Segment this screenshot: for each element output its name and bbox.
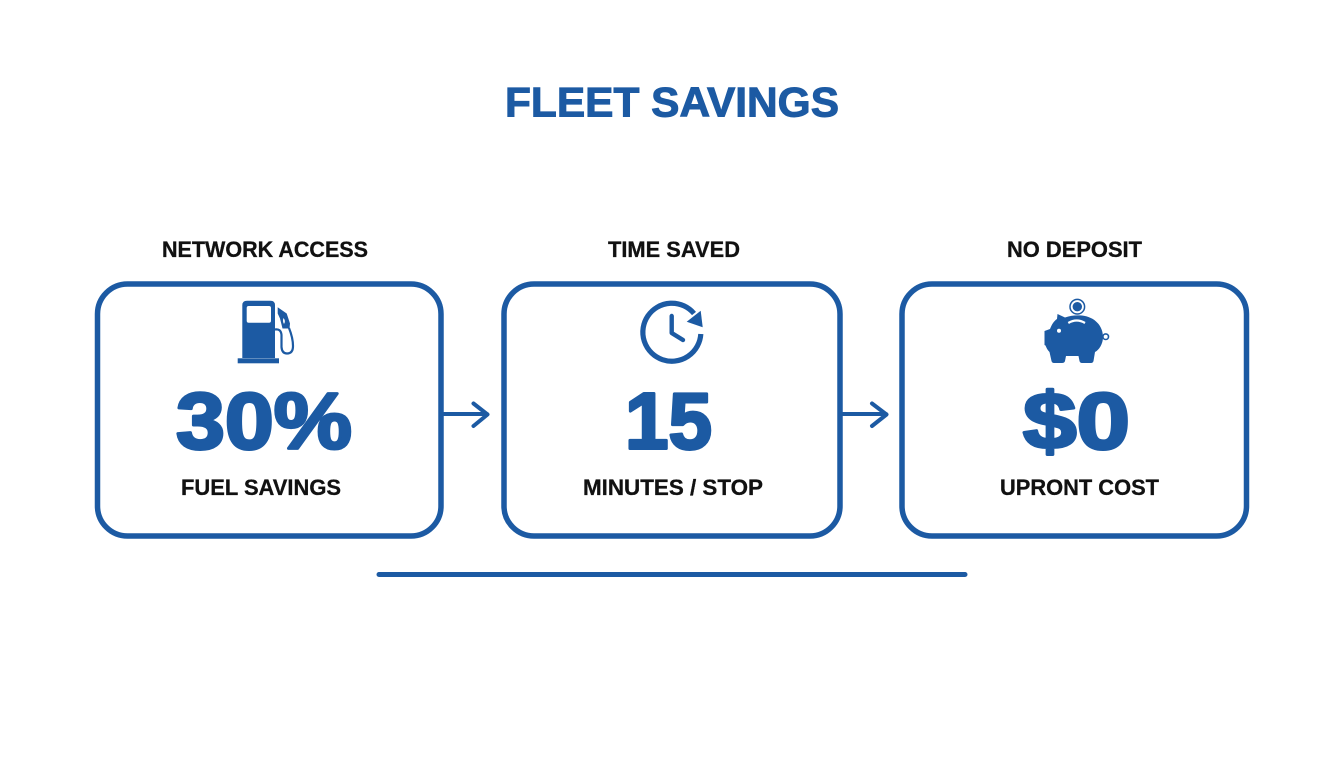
caption: minutes per stop: MINUTES / STOP <box>583 475 763 500</box>
big number: 30%: 30% <box>176 376 352 466</box>
icon: piggy bank <box>1044 299 1108 363</box>
arrow: network access to time saved <box>444 404 488 426</box>
heading: network access: NETWORK ACCESS <box>162 237 368 262</box>
bottom rule <box>379 572 965 577</box>
caption: upfront cost: UPRONT COST <box>1000 475 1160 500</box>
caption: fuel savings: FUEL SAVINGS <box>181 475 341 500</box>
panel: no deposit <box>902 237 1246 536</box>
card frame: no deposit <box>902 284 1246 536</box>
heading: time saved: TIME SAVED <box>608 237 740 262</box>
big number: $0: $0 <box>1023 376 1130 466</box>
panel: time saved <box>504 237 840 536</box>
title: FLEET SAVINGS <box>505 78 839 126</box>
icon: clock with arrow <box>643 303 703 361</box>
big number: 15: 15 <box>625 376 712 466</box>
icon: fuel pump <box>238 301 293 363</box>
arrow: time saved to no deposit <box>843 404 886 426</box>
heading: no deposit: NO DEPOSIT <box>1007 237 1143 262</box>
card frame: network access <box>98 284 441 536</box>
card frame: time saved <box>504 284 840 536</box>
panel: network access <box>98 237 441 536</box>
